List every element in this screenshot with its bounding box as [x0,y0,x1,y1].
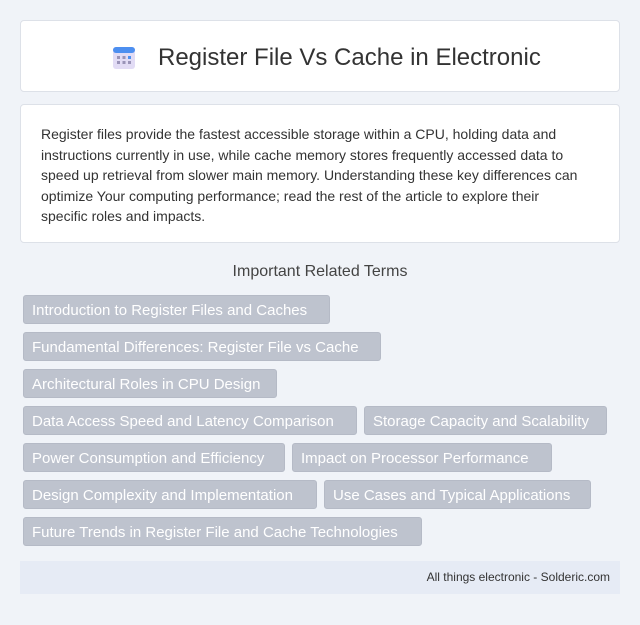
icon: calendar grid [113,47,135,69]
heading: related terms: Important Related Terms [233,263,407,280]
tags: Impact on Processor Performance [301,450,529,467]
intro text panel: Register files provide the fastest accessible storage within a CPU, holding data and instructions currently in use, while cache memory stores frequently accessed data to speed up retrieval from slower main memory. Understanding these key differences can optimize Your computing performance; read the rest of the article to explore their specific roles and impacts. [41,126,577,224]
tags: Design Complexity and Implementation [32,487,293,504]
tags: Data Access Speed and Latency Comparison [32,413,334,430]
tags: Power Consumption and Efficiency [32,450,264,467]
footer: All things electronic - Solderic.com [427,570,610,584]
footer [20,561,620,594]
tags: Introduction to Register Files and Caches [32,302,307,319]
title: Register File Vs Cache in Electronic [158,44,541,71]
tags: Fundamental Differences: Register File vs Cache [32,339,359,356]
tags: Use Cases and Typical Applications [333,487,570,504]
intro text panel [20,104,620,243]
tags: Storage Capacity and Scalability [373,413,589,430]
header panel [20,20,620,92]
tags: Future Trends in Register File and Cache Technologies [32,524,398,541]
tags: Architectural Roles in CPU Design [32,376,260,393]
